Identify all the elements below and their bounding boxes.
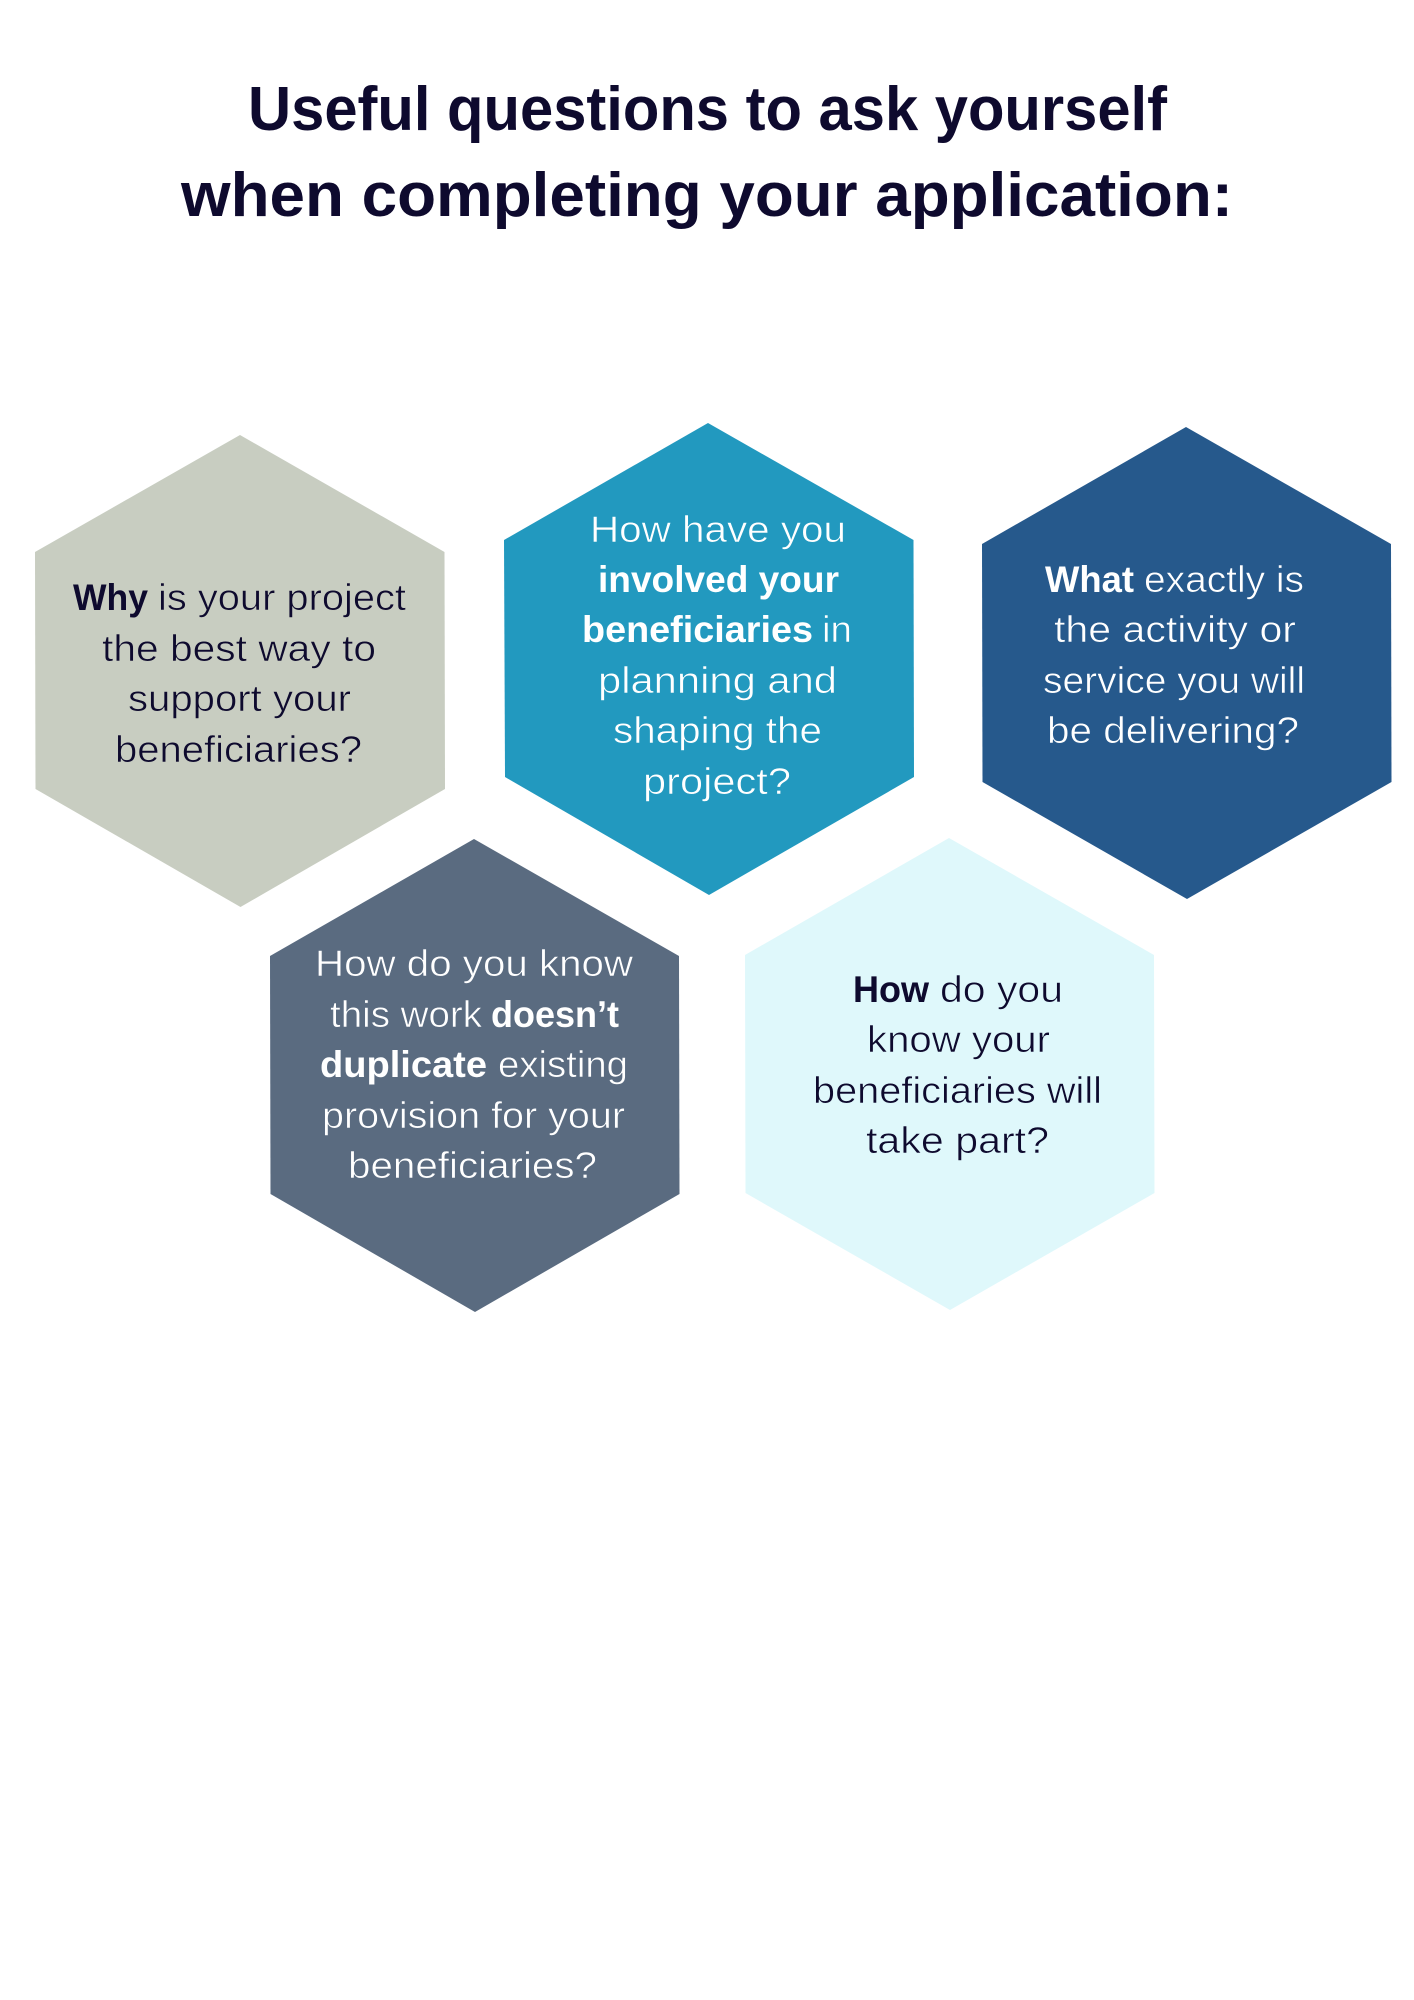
- panel: what hexagon: [982, 427, 1392, 899]
- text: involvement question: shaping the: [613, 710, 822, 751]
- hexagon shape: teal: [504, 423, 914, 895]
- text: involvement question: planning and: [598, 660, 837, 701]
- hexagon shape: navy: [982, 427, 1392, 899]
- text: how question: know your: [867, 1019, 1050, 1060]
- text: what question: service you will: [1043, 660, 1305, 701]
- text: duplication question: provision for your: [322, 1095, 625, 1136]
- hexagon shape: sage: [35, 435, 445, 907]
- text: what question: [1043, 559, 1305, 751]
- text: how question: take part?: [866, 1120, 1049, 1161]
- text: involvement question: [582, 509, 852, 802]
- text: why question: support your: [128, 678, 351, 719]
- text: how question: How: [853, 969, 929, 1010]
- panel: why hexagon: [35, 435, 445, 907]
- panel: involved beneficiaries hexagon: [504, 423, 914, 895]
- text: involvement question: How have you: [590, 509, 846, 550]
- panel: how hexagon: [745, 838, 1154, 1310]
- panel: duplicate hexagon: [270, 839, 680, 1312]
- text: what question: be delivering?: [1047, 710, 1299, 751]
- text: duplication question: How do you know: [315, 943, 633, 984]
- text: duplication question: doesn’t: [491, 994, 619, 1035]
- text: involvement question: project?: [643, 761, 791, 802]
- text: what question: the activity or: [1054, 609, 1296, 650]
- title: when completing your application:: [180, 161, 1233, 230]
- text: why question: the best way to: [102, 628, 376, 669]
- hexagon shape: pale aqua: [745, 838, 1154, 1310]
- text: duplication question: [315, 943, 633, 1186]
- text: duplication question: duplicate: [320, 1044, 487, 1085]
- title: [180, 75, 1233, 230]
- text: involvement question: beneficiaries: [582, 609, 813, 650]
- hexagon shape: slate: [270, 839, 680, 1312]
- text: involvement question: involved your: [598, 559, 839, 600]
- text: why question: Why: [73, 577, 148, 618]
- text: what question: What: [1045, 559, 1134, 600]
- text: duplication question: beneficiaries?: [348, 1145, 597, 1186]
- text: duplication question: this work: [330, 994, 483, 1035]
- text: duplication question: existing: [498, 1044, 628, 1085]
- text: how question: [813, 969, 1102, 1161]
- text: what question: exactly is: [1144, 559, 1304, 600]
- text: why question: beneficiaries?: [115, 729, 362, 770]
- text: why question: is your project: [158, 577, 407, 618]
- text: how question: do you: [940, 969, 1063, 1010]
- text: how question: beneficiaries will: [813, 1070, 1102, 1111]
- text: involvement question: in: [822, 609, 852, 650]
- text: why question: [73, 577, 407, 770]
- title: Useful questions to ask yourself: [248, 75, 1167, 144]
